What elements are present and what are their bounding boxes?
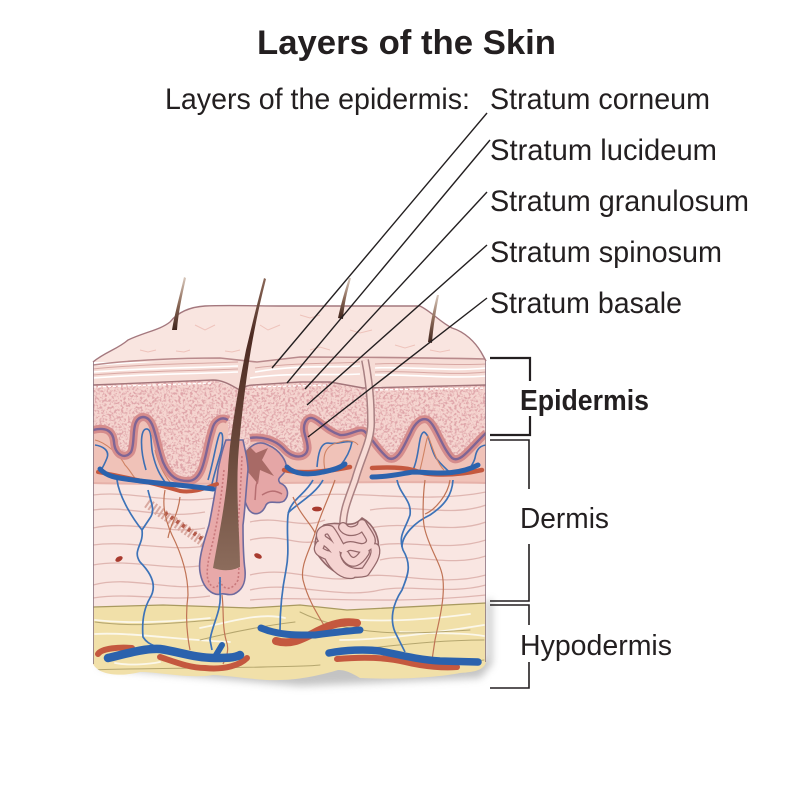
arrector pili muscle (147, 503, 205, 543)
epidermis granular layer (94, 380, 486, 477)
hair follicle (200, 440, 248, 595)
upper vascular plexus: right (372, 465, 482, 477)
hair shaft (213, 278, 266, 570)
epidermis layer labels: Stratum granulosum (490, 185, 749, 218)
epidermis layer labels: Stratum lucideum (490, 134, 717, 167)
papillary capillaries (95, 429, 486, 484)
bracket: hypodermis (490, 605, 529, 688)
small hair: left (172, 277, 186, 330)
lower vascular plexus: centre (261, 622, 360, 642)
epidermis layer labels: Stratum spinosum (490, 236, 722, 269)
surface creases (140, 315, 450, 352)
right edge (93, 361, 486, 664)
skin surface (94, 306, 484, 362)
sweat gland duct (343, 360, 371, 527)
stratum lucidum line (93, 380, 486, 390)
lower vascular plexus: left (98, 645, 247, 668)
subtitle: layers of the epidermis: Layers of the epidermis: (165, 83, 470, 116)
epidermis layer labels: Stratum basale (490, 287, 682, 320)
skin cross-section diagram (90, 277, 492, 690)
bracket: epidermis (490, 358, 530, 435)
corneum band (90, 357, 490, 390)
leader lines (272, 113, 490, 437)
label: dermis: Dermis (520, 503, 609, 535)
pigment dots (114, 507, 322, 563)
epidermis layer labels (490, 83, 749, 320)
dermal-epidermal junction (93, 417, 486, 481)
surface outline (93, 306, 486, 362)
drop shadow (100, 600, 492, 686)
upper vascular plexus: left (98, 469, 217, 491)
small hair: middle (338, 278, 351, 319)
label: hypodermis: Hypodermis (520, 630, 672, 662)
sebaceous gland (240, 443, 287, 514)
papillary dermis (90, 420, 490, 483)
lower vascular plexus: right (329, 650, 478, 667)
bracket: dermis (490, 440, 529, 601)
thin blue vessels (117, 480, 453, 652)
title: Layers of the Skin (257, 24, 556, 62)
epidermis layer labels: Stratum corneum (490, 83, 710, 116)
dermis fibres (93, 492, 486, 600)
label: epidermis: Epidermis (520, 385, 649, 417)
skin block layers (90, 300, 490, 690)
small hair: right (428, 295, 439, 343)
hypodermis (93, 604, 486, 680)
sweat gland coil (315, 518, 378, 576)
dermis (94, 483, 486, 610)
upper vascular plexus: centre (284, 464, 350, 474)
hypodermis fat streaks (93, 612, 484, 670)
thin red vessels (164, 480, 450, 664)
